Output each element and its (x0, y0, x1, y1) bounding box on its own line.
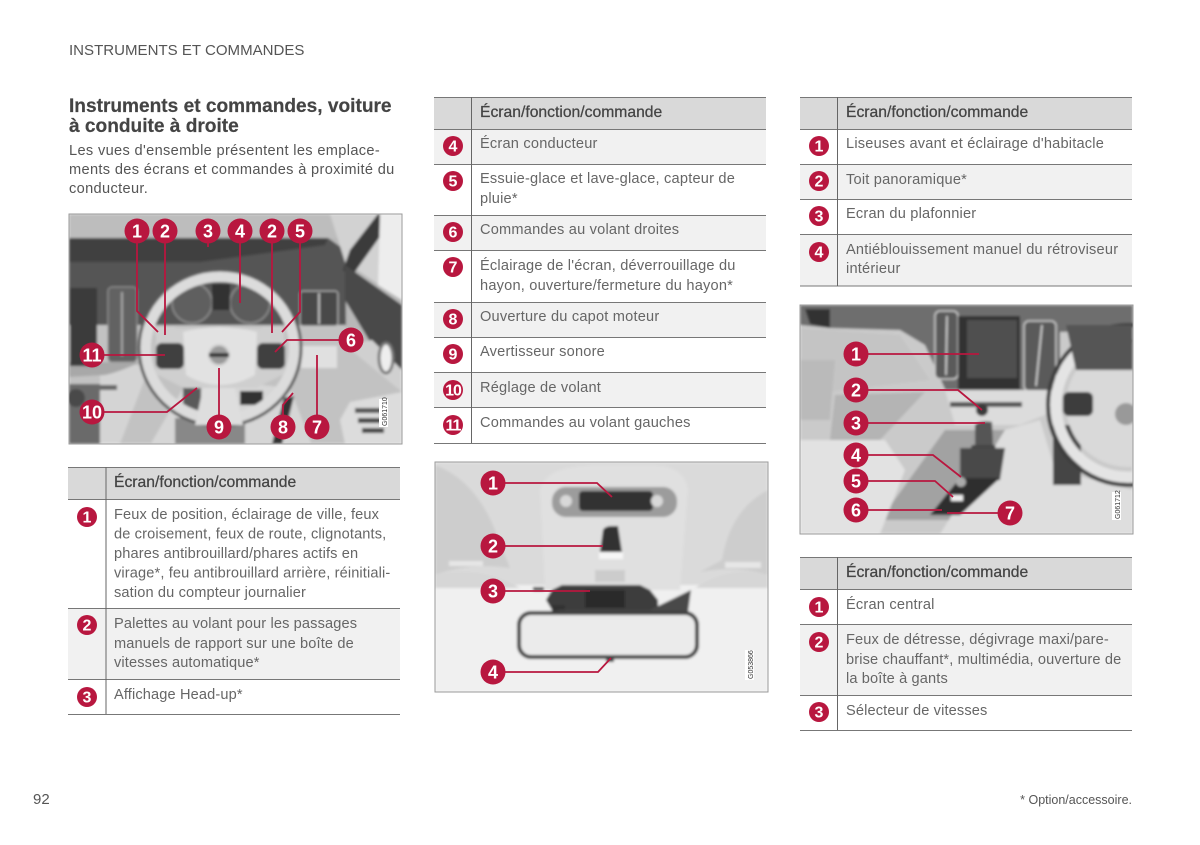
table 2: items 4 to 11: Commandes au volant gauches (480, 415, 691, 431)
table 4: console items 1 to 3 (800, 557, 1132, 730)
callout badges: 3 (203, 222, 213, 242)
table 1: items 1 to 3: 3 (83, 690, 92, 706)
table 3: overhead items 1 to 4: Écran/fonction/commande (846, 102, 1029, 121)
callout badges (80, 218, 364, 440)
figure: steering wheel and driver controls (67, 214, 402, 445)
callout badges: 4 (851, 446, 861, 466)
table 1: items 1 to 3: 1 (83, 510, 92, 526)
callout badges: 6 (346, 330, 356, 350)
page header: INSTRUMENTS ET COMMANDES (69, 42, 304, 59)
table 2: items 4 to 11: 7 (449, 260, 458, 276)
figure: overhead console and mirror (435, 462, 768, 692)
table 1: items 1 to 3: Palettes au volant pour les passages (114, 616, 357, 632)
table 2: items 4 to 11: pluie* (480, 191, 518, 207)
table 4: console items 1 to 3: 1 (815, 600, 824, 616)
table 2: items 4 to 11: Commandes au volant droites (480, 222, 679, 238)
table 2: items 4 to 11 (434, 97, 766, 444)
callout badges: 1 (488, 474, 498, 494)
intro text (69, 143, 395, 197)
table 1: items 1 to 3: de croisement, feux de route, clignotants, (114, 526, 386, 542)
callout badges: 4 (488, 662, 498, 682)
table 2: items 4 to 11: Ouverture du capot moteur (480, 309, 659, 325)
callout badges: 7 (1005, 504, 1015, 524)
footnote: * Option/accessoire. (1020, 793, 1132, 807)
table 3: overhead items 1 to 4: Ecran du plafonnier (846, 206, 976, 222)
table 2: items 4 to 11: Avertisseur sonore (480, 344, 605, 360)
figure: steering wheel and driver controls: G061710 (382, 397, 389, 426)
table 1: items 1 to 3: manuels de rapport sur une boîte de (114, 636, 354, 652)
callout badges: 3 (851, 414, 861, 434)
callout badges: 3 (488, 582, 498, 602)
callout leaders (856, 354, 1010, 513)
table 1: items 1 to 3: Feux de position, éclairage de ville, feux (114, 507, 380, 523)
table 1: items 1 to 3: phares antibrouillard/phares actifs en (114, 546, 358, 562)
section title: Instruments et commandes, voiture (69, 96, 392, 117)
table 1: items 1 to 3 (68, 467, 400, 714)
figure: centre console: G061712 (1115, 490, 1122, 519)
table 3: overhead items 1 to 4: 1 (815, 138, 824, 156)
table 3: overhead items 1 to 4: intérieur (846, 261, 901, 277)
callout badges: 2 (851, 380, 861, 400)
callout badges: 4 (235, 222, 245, 242)
table 3: overhead items 1 to 4: Liseuses avant et éclairage d'habitacle (846, 136, 1104, 152)
figure: overhead console and mirror: G053866 (748, 650, 755, 679)
callout badges (480, 470, 506, 684)
callout badges: 6 (851, 500, 861, 520)
section title (69, 96, 392, 137)
table 4: console items 1 to 3: Écran/fonction/commande (846, 562, 1029, 581)
callout leaders (493, 483, 612, 672)
table 2: items 4 to 11: 9 (449, 346, 458, 364)
table 2: items 4 to 11: Essuie-glace et lave-glace, capteur de (480, 171, 735, 187)
callout badges (844, 342, 1022, 526)
table 1: items 1 to 3: vitesses automatique* (114, 655, 260, 671)
table 4: console items 1 to 3: Feux de détresse, dégivrage maxi/pare- (846, 632, 1109, 648)
callout badges: 11 (82, 346, 102, 366)
table 4: console items 1 to 3: brise chauffant*, multimédia, ouverture de (846, 652, 1121, 668)
callout badges: 1 (851, 344, 861, 364)
table 2: items 4 to 11: Réglage de volant (480, 380, 601, 396)
table 2: items 4 to 11: Éclairage de l'écran, déverrouillage du (480, 257, 736, 274)
callout badges: 1 (132, 222, 142, 242)
table 2: items 4 to 11: 11 (446, 418, 462, 434)
table 4: console items 1 to 3: la boîte à gants (846, 671, 948, 687)
callout badges: 5 (851, 472, 861, 492)
table 4: console items 1 to 3: Écran central (846, 596, 935, 613)
figure: centre console (800, 304, 1134, 534)
table 4: console items 1 to 3: 3 (815, 704, 824, 722)
section title: à conduite à droite (69, 116, 239, 137)
table 2: items 4 to 11: 5 (449, 174, 458, 190)
table 3: overhead items 1 to 4: 2 (815, 174, 824, 190)
callout badges: 2 (160, 222, 170, 242)
callout badges: 9 (214, 418, 224, 438)
table 1: items 1 to 3: virage*, feu antibrouillard arrière, réinitiali- (114, 566, 390, 582)
table 3: overhead items 1 to 4 (800, 97, 1132, 286)
table 4: console items 1 to 3: Sélecteur de vitesses (846, 703, 987, 719)
table 2: items 4 to 11: hayon, ouverture/fermeture du hayon* (480, 278, 733, 294)
callout badges: 2 (488, 536, 498, 556)
callout badges: 5 (295, 222, 305, 242)
callout badges: 8 (278, 418, 288, 438)
intro text: Les vues d'ensemble présentent les emplace- (69, 143, 380, 159)
table 1: items 1 to 3: sation du compteur journalier (114, 585, 306, 601)
callout badges: 7 (312, 418, 322, 438)
table 4: console items 1 to 3: 2 (815, 634, 824, 652)
table 3: overhead items 1 to 4: Toit panoramique* (846, 172, 967, 188)
table 3: overhead items 1 to 4: 3 (815, 208, 824, 226)
intro text: ments des écrans et commandes à proximité du (69, 162, 395, 178)
table 1: items 1 to 3: Affichage Head-up* (114, 687, 243, 703)
table 2: items 4 to 11: Écran conducteur (480, 135, 598, 152)
table 2: items 4 to 11: Écran/fonction/commande (480, 102, 663, 121)
callout leaders (92, 231, 351, 427)
table 1: items 1 to 3: 2 (83, 618, 92, 634)
intro text: conducteur. (69, 181, 148, 197)
table 3: overhead items 1 to 4: Antiéblouissement manuel du rétroviseur (846, 242, 1118, 258)
callout badges: 2 (267, 222, 277, 242)
callout badges: 10 (82, 402, 102, 422)
table 3: overhead items 1 to 4: 4 (815, 244, 824, 262)
table 2: items 4 to 11: 6 (449, 224, 458, 242)
table 2: items 4 to 11: 8 (449, 312, 458, 328)
page number: 92 (33, 791, 50, 808)
table 2: items 4 to 11: 10 (445, 382, 462, 400)
table 1: items 1 to 3: Écran/fonction/commande (114, 472, 297, 491)
table 2: items 4 to 11: 4 (449, 138, 458, 156)
